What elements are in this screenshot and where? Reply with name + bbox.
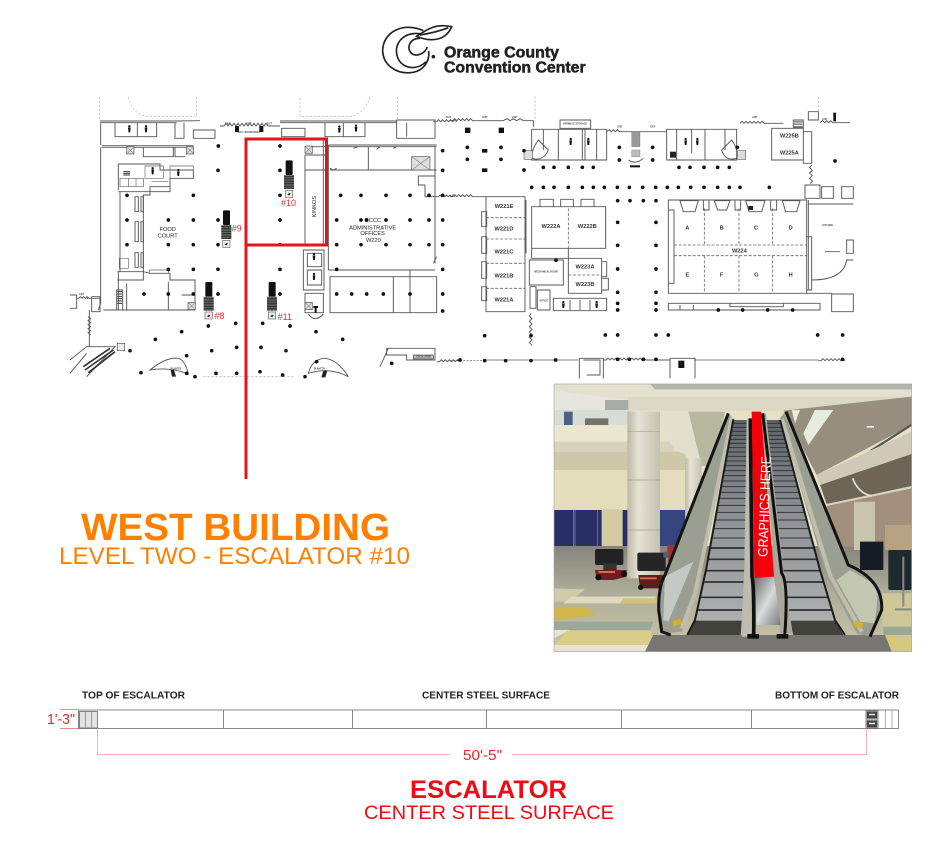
escalator number labels: #11 xyxy=(278,312,292,322)
meeting room labels: EXIT xyxy=(752,117,758,119)
column dots xyxy=(127,146,443,377)
meeting room labels: W225B xyxy=(780,134,799,140)
meeting room labels: G xyxy=(754,272,759,278)
escalator #10 icon xyxy=(284,160,294,197)
room labels xyxy=(79,117,451,370)
meeting room labels: H xyxy=(789,272,793,278)
escalator number labels: #9 xyxy=(232,224,242,234)
diagram labels: TOP OF ESCALATOR xyxy=(82,690,186,702)
room labels: EXIT xyxy=(246,124,252,126)
meeting room labels: KITCHEN xyxy=(822,225,833,227)
photo: red graphics area xyxy=(752,412,774,578)
room labels: EXIT xyxy=(225,124,231,126)
diagram labels: CENTER STEEL SURFACE xyxy=(422,690,550,702)
photo background: hall xyxy=(554,384,912,652)
meeting room labels: SPRINKLE STORAGE xyxy=(563,122,587,125)
top cap detail xyxy=(80,712,98,728)
photo: red graphics area: GRAPHICS HERE xyxy=(755,456,774,557)
meeting room labels: W222A xyxy=(542,224,560,230)
heading: West Building: WEST BUILDING xyxy=(81,507,390,549)
floor plan: west section xyxy=(70,97,459,377)
photo: right glass balustrade xyxy=(672,412,882,637)
room labels: WALL ROOM MAINT xyxy=(237,131,260,134)
room labels: ESCALATOR xyxy=(416,356,431,359)
subheading: Level Two - Escalator #10: LEVEL TWO - ESCALATOR #10 xyxy=(59,543,410,570)
escalator #8 icon xyxy=(204,282,214,319)
logo wordmark xyxy=(444,44,586,76)
room labels: ADMINISTRATIVE xyxy=(349,225,396,231)
icon: orange logo mark xyxy=(383,26,452,73)
room labels: PLANTER xyxy=(170,367,182,370)
meeting room labels: A xyxy=(685,226,689,232)
photo: left steps xyxy=(688,420,747,635)
meeting room labels: W222B xyxy=(578,224,597,230)
subheading: Center Steel Surface: CENTER STEEL SURFACE xyxy=(364,802,614,824)
dimension: length 50'-5": 50'-5" xyxy=(463,748,502,764)
meeting room labels: EXIT xyxy=(482,117,488,119)
meeting room labels: C xyxy=(754,226,758,232)
meeting room labels: W221B xyxy=(495,274,513,280)
room labels: PLANTER xyxy=(314,367,325,370)
room labels: EXIT xyxy=(79,294,85,296)
meeting room labels: W224 xyxy=(732,249,748,255)
restroom icons xyxy=(128,124,357,280)
column dots xyxy=(460,130,843,361)
restroom icons xyxy=(562,138,699,308)
photo: escalator base xyxy=(645,635,892,652)
meeting room labels: W225A xyxy=(780,150,799,156)
photo: right steps xyxy=(765,418,845,637)
meeting room labels: EXIT xyxy=(617,126,623,128)
meeting room labels: W221C xyxy=(495,249,513,255)
diagram labels xyxy=(82,690,900,702)
surface bar xyxy=(78,710,898,728)
meeting room labels xyxy=(482,117,833,303)
walls and rooms xyxy=(70,97,459,377)
room labels: OCCC xyxy=(364,218,381,224)
escalator #11 icon xyxy=(267,282,277,319)
diagram labels: BOTTOM OF ESCALATOR xyxy=(775,690,900,702)
meeting room labels: MECHANICAL ROOM xyxy=(534,271,558,274)
escalator number labels xyxy=(214,198,296,322)
logo: Orange County Convention Center xyxy=(383,26,586,76)
room labels: EXIT xyxy=(267,124,272,126)
heading: Escalator: ESCALATOR xyxy=(410,776,567,804)
room labels: W220 xyxy=(366,238,381,244)
walls and rooms xyxy=(450,97,853,378)
room labels: EXIT xyxy=(446,117,451,119)
meeting room labels: D xyxy=(789,226,793,232)
meeting room labels: F xyxy=(720,272,724,278)
meeting room labels: W223B xyxy=(576,282,594,288)
meeting room labels: W221D xyxy=(495,227,513,233)
dimension: length 50'-5" xyxy=(98,728,866,764)
logo wordmark: Convention Center xyxy=(444,59,586,76)
photo: ceiling xyxy=(554,384,912,547)
meeting room labels: B xyxy=(720,226,724,232)
room labels: FOOD xyxy=(159,227,176,233)
photo: right background objects xyxy=(860,525,912,609)
room labels: KINKOS xyxy=(312,196,318,217)
meeting room labels: E xyxy=(685,272,689,278)
room labels: COURT xyxy=(158,234,178,240)
diagram: centre steel surface elevation xyxy=(47,690,900,764)
red callout frame and leader line for escalator #10 xyxy=(246,139,326,479)
photo: mobility scooters xyxy=(595,545,677,590)
room labels: OFFICES xyxy=(360,231,385,237)
meeting room labels: OFFICE xyxy=(539,300,548,302)
meeting room labels: EXIT xyxy=(512,117,518,119)
escalator #9 icon xyxy=(221,210,231,247)
logo wordmark: Orange County xyxy=(444,44,559,61)
meeting room labels: EXIT xyxy=(822,119,828,121)
photo: left glass balustrade xyxy=(658,413,733,635)
photo: columns xyxy=(627,412,875,578)
meeting room labels: W221A xyxy=(495,297,513,303)
meeting room labels: W221E xyxy=(495,204,513,210)
floor plan: east section xyxy=(450,97,853,378)
escalator number labels: #10 xyxy=(281,198,296,208)
meeting room labels: EXIT xyxy=(650,126,656,128)
photo: centre steel surface xyxy=(742,413,793,639)
escalator number labels: #8 xyxy=(214,311,224,321)
bottom cap detail xyxy=(866,710,892,728)
dimension: width 1'-3": 1'-3" xyxy=(47,711,75,728)
photo: escalator with graphics placement xyxy=(554,384,912,652)
meeting room labels: W223A xyxy=(576,265,594,271)
